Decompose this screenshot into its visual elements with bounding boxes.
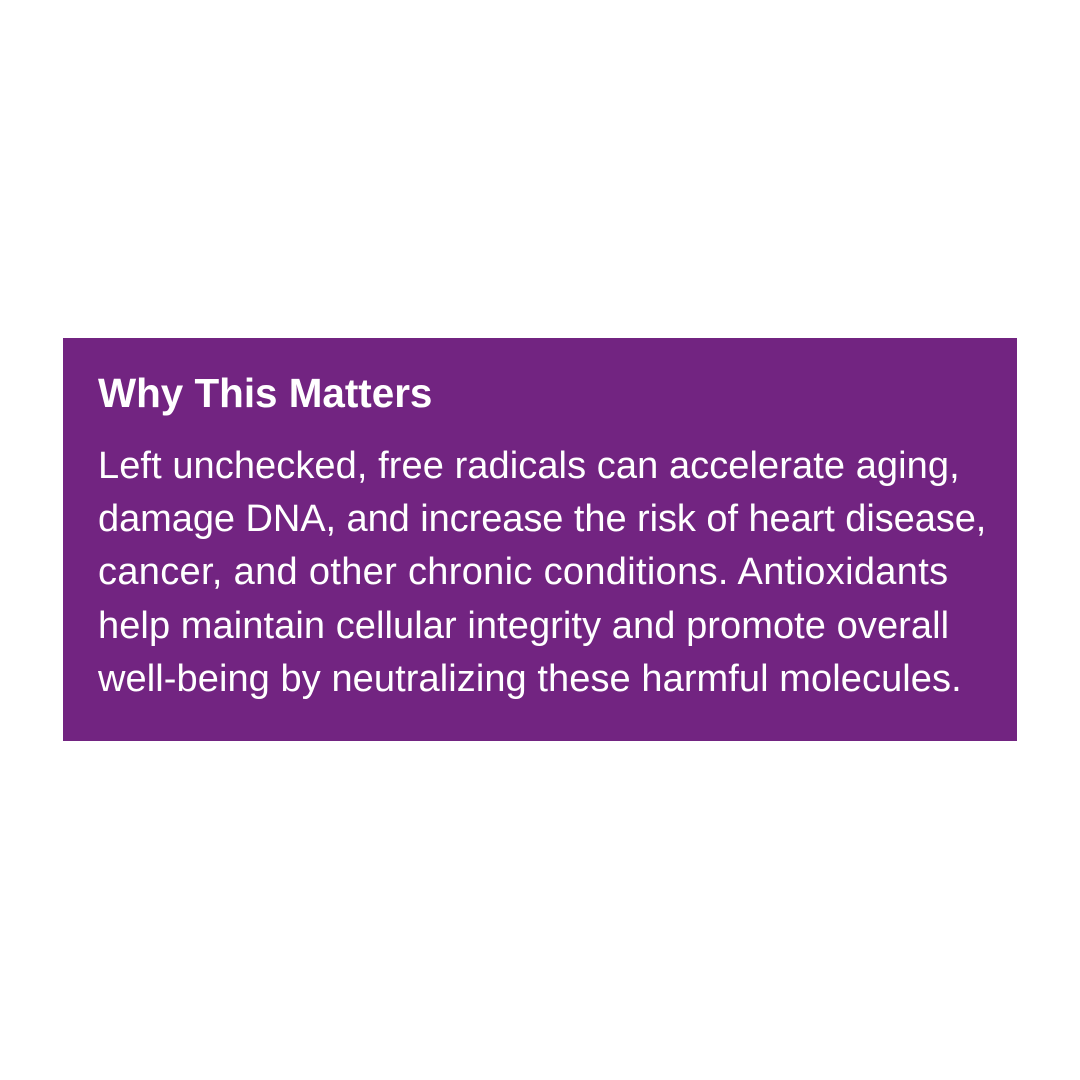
- heading: Why This Matters: [98, 370, 432, 416]
- text block: explanation: damage DNA, and increase the risk of heart disease,: [98, 498, 986, 540]
- text block: explanation: well-being by neutralizing these harmful molecules.: [98, 658, 962, 700]
- panel: why this matters: [63, 338, 1017, 741]
- text block: explanation: [98, 445, 986, 700]
- text block: explanation: Left unchecked, free radicals can accelerate aging,: [98, 445, 960, 487]
- text block: explanation: cancer, and other chronic conditions. Antioxidants: [98, 551, 948, 593]
- text block: explanation: help maintain cellular integrity and promote overall: [98, 605, 949, 647]
